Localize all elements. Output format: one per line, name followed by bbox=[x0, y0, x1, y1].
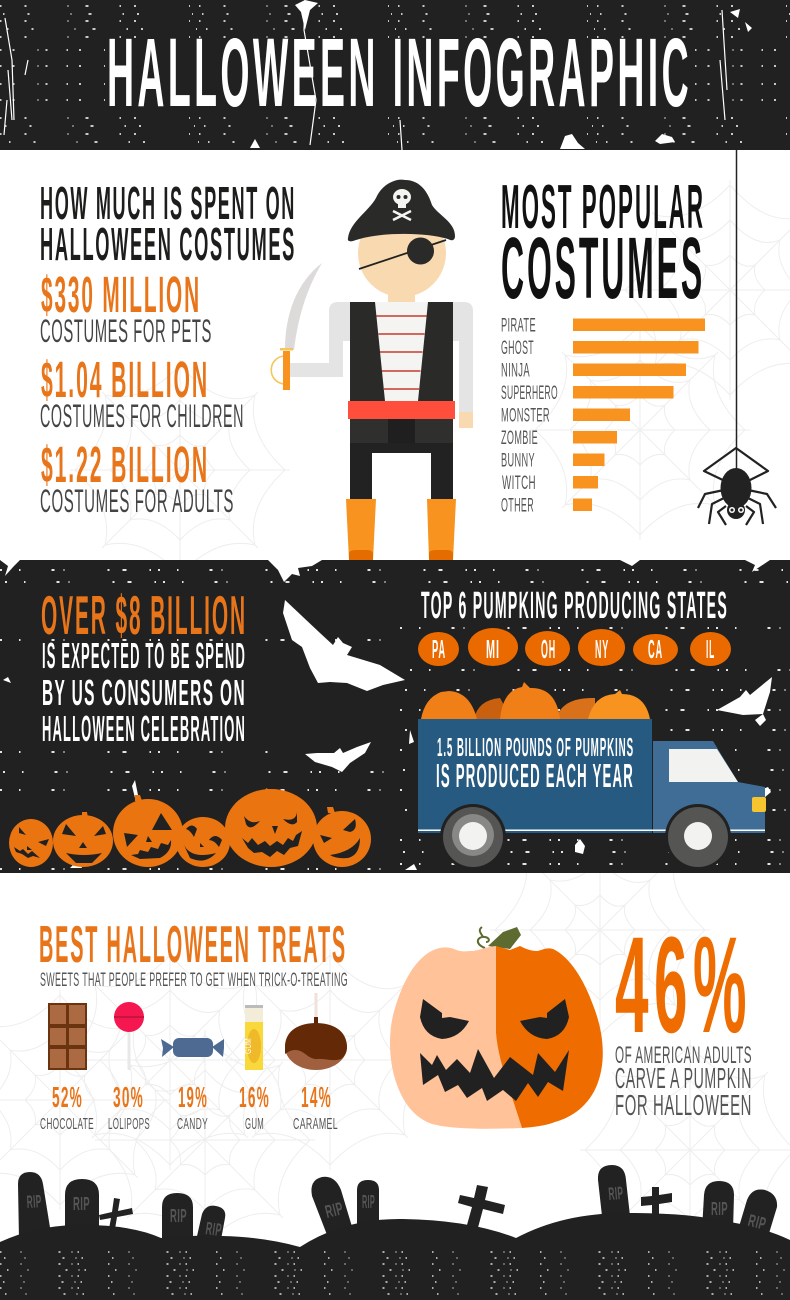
panel: costume spending: COSTUMES FOR PETS bbox=[40, 313, 212, 349]
state pumpkins bbox=[418, 628, 731, 666]
panel: costume spending: $1.22 BILLION bbox=[41, 436, 209, 493]
RIP labels: RIP bbox=[711, 1199, 728, 1219]
RIP labels: RIP bbox=[26, 1191, 42, 1212]
pumpkin: CA: CA bbox=[648, 634, 663, 664]
pumpkin: PA: PA bbox=[432, 634, 446, 664]
pumpkin: CA bbox=[633, 634, 678, 665]
stat: caramel: 14% bbox=[301, 1082, 332, 1114]
panel: dark middle band bbox=[0, 560, 790, 873]
pumpkin 2 bbox=[53, 812, 113, 867]
bar chart: NINJA bbox=[501, 360, 530, 382]
panel: costume spending: $330 MILLION bbox=[41, 266, 201, 323]
stat: candy: CANDY bbox=[177, 1116, 208, 1133]
pumpkin 5 bbox=[225, 788, 317, 867]
pumpkin 3 bbox=[113, 795, 183, 867]
right wheel bbox=[665, 804, 731, 870]
panel: best halloween treats bbox=[39, 916, 348, 1133]
bar chart: OTHER bbox=[501, 496, 534, 516]
pumpkin: MI bbox=[468, 628, 518, 666]
RIP labels: RIP bbox=[204, 1218, 223, 1240]
pumpkin: OH: OH bbox=[541, 634, 556, 664]
graveyard silhouette bbox=[0, 1165, 790, 1300]
header band bbox=[0, 0, 790, 150]
RIP labels: RIP bbox=[73, 1194, 90, 1214]
icon: small bat bbox=[305, 742, 371, 772]
text: BY US CONSUMERS ON bbox=[42, 672, 246, 713]
skull and crossbones bbox=[393, 189, 411, 220]
stat: chocolate bbox=[40, 1082, 94, 1133]
bar chart: GHOST bbox=[501, 338, 534, 359]
callout: over 8 billion bbox=[41, 584, 247, 749]
icon: pirate figure bbox=[271, 180, 473, 560]
RIP labels: RIP bbox=[170, 1206, 187, 1226]
pumpkin: PA bbox=[418, 632, 459, 666]
bar chart: MONSTER bbox=[501, 406, 550, 426]
stat: chocolate: 52% bbox=[52, 1082, 83, 1114]
bar chart: PIRATE bbox=[501, 316, 536, 336]
RIP labels bbox=[26, 1183, 768, 1240]
stat: gum: GUM bbox=[245, 1116, 264, 1133]
bar chart: BUNNY bbox=[501, 450, 535, 472]
eye patch bbox=[359, 238, 446, 269]
bar chart bbox=[501, 316, 705, 516]
panel: most popular costumes bbox=[501, 173, 705, 516]
icon: lollipop bbox=[114, 1002, 144, 1070]
icon: chocolate bbox=[48, 1003, 87, 1070]
stat: lollipops bbox=[108, 1082, 150, 1133]
stat: gum bbox=[239, 1082, 270, 1133]
pumpkin: OH bbox=[525, 631, 570, 666]
arms bbox=[290, 302, 473, 412]
hat bbox=[348, 180, 455, 241]
stat: caramel bbox=[293, 1082, 338, 1133]
icon: big bat bbox=[283, 600, 405, 691]
pumpkin: IL bbox=[690, 632, 731, 666]
pumpkin: IL: IL bbox=[706, 634, 715, 664]
text: IS EXPECTED TO BE SPEND bbox=[42, 635, 246, 676]
sword bbox=[271, 263, 322, 390]
panel: costume spending: COSTUMES FOR ADULTS bbox=[40, 483, 234, 519]
bar chart: WITCH bbox=[502, 473, 536, 494]
stat: lollipops: 30% bbox=[113, 1082, 144, 1114]
bar chart: ZOMBIE bbox=[501, 428, 538, 449]
bar chart: SUPERHERO bbox=[501, 383, 558, 404]
panel: costume spending: $1.04 BILLION bbox=[41, 351, 209, 408]
stat: candy bbox=[177, 1082, 208, 1133]
text: OVER $8 BILLION bbox=[41, 584, 247, 646]
text: HOW MUCH IS SPENT ON bbox=[40, 177, 296, 229]
panel: best halloween treats: 19% bbox=[178, 1082, 208, 1114]
panel: best halloween treats: 16% bbox=[239, 1082, 270, 1114]
icon: split carved pumpkin bbox=[390, 927, 603, 1129]
icon: caramel apple bbox=[285, 993, 347, 1070]
left wheel bbox=[440, 804, 506, 870]
icon: gum bbox=[243, 1005, 263, 1070]
icon: right bat bbox=[717, 677, 772, 715]
tombstones and crosses bbox=[18, 1165, 777, 1245]
truck load of pumpkins bbox=[421, 682, 650, 719]
row of jack-o-lanterns bbox=[9, 788, 371, 867]
icon: pumpkin truck bbox=[418, 682, 766, 870]
text: HALLOWEEN CELEBRATION bbox=[42, 708, 246, 749]
RIP labels: RIP bbox=[746, 1210, 768, 1234]
pumpkin: MI: MI bbox=[486, 634, 500, 664]
panel: best halloween treats: LOLIPOPS bbox=[108, 1116, 150, 1133]
pumpkin 6 bbox=[313, 807, 371, 867]
icon: candy bbox=[161, 1038, 224, 1057]
icon: gum: GUM bbox=[243, 1038, 253, 1054]
icon: spider on thread bbox=[698, 150, 776, 525]
text: HALLOWEEN COSTUMES bbox=[40, 218, 296, 270]
pumpkin 1 bbox=[9, 819, 53, 867]
pumpkin: NY: NY bbox=[595, 634, 609, 664]
RIP labels: RIP bbox=[323, 1198, 345, 1222]
pumpkin 4 bbox=[176, 817, 230, 867]
RIP labels: RIP bbox=[362, 1192, 375, 1212]
panel: costume spending: COSTUMES FOR CHILDREN bbox=[40, 398, 244, 434]
pumpkin: NY bbox=[578, 629, 625, 666]
stat: chocolate: CHOCOLATE bbox=[40, 1116, 94, 1133]
panel: costume spending bbox=[40, 177, 296, 519]
RIP labels: RIP bbox=[608, 1183, 624, 1204]
stat: caramel: CARAMEL bbox=[293, 1116, 338, 1133]
stat: 46 percent bbox=[615, 909, 752, 1122]
text: SWEETS THAT PEOPLE PREFER TO GET WHEN TRICK-O-TREATING bbox=[40, 970, 348, 991]
